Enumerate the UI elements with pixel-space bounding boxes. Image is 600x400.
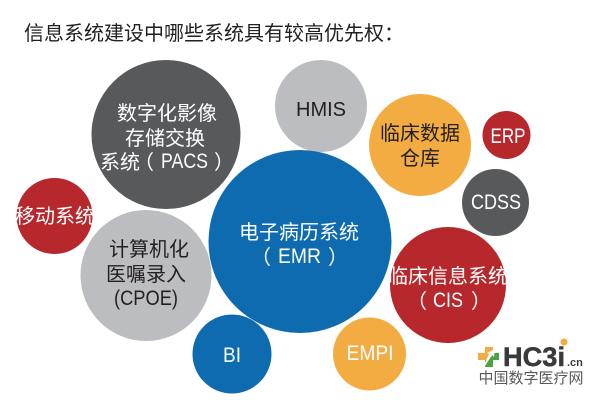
bubble: CIS: ） [471,290,491,313]
bubble: BI: BI [223,344,241,367]
bubble: mobile system [15,178,95,254]
bubble: PACS: 系统 [100,151,140,174]
bubble: CPOE [80,210,212,341]
bubble: clinical data warehouse [369,94,471,196]
bubble: HMIS: HMIS [296,99,346,121]
title: 信息系统建设中哪些系统具有较高优先权： [24,22,404,45]
bubble: CIS: 临床信息系统 [388,265,508,288]
bubble: BI [192,314,272,394]
bubble: EMR: EMR [278,245,321,268]
icon: medical cross [478,347,499,367]
bubble: clinical data warehouse: 临床数据 [380,122,460,145]
bubble: CPOE: (CPOE) [114,287,178,310]
bubble: EMR: 电子病历系统 [239,221,359,244]
logo domain: .cn [567,357,583,369]
bubble: CIS: CIS [433,289,463,312]
logo wordmark: HC3i [503,342,565,372]
bubble: CPOE: 计算机化 [109,238,189,261]
logo tagline: 中国数字医疗网 [478,370,584,387]
bubble: PACS: ） [214,151,234,174]
bubble: PACS [92,60,240,209]
logo: HC3i [478,338,584,387]
bubble: EMR [208,150,392,333]
bubble: CDSS: CDSS [471,191,521,214]
bubble: CDSS [462,169,529,236]
bubble: HMIS [275,60,367,152]
logo dot [560,338,568,346]
bubble: ERP: ERP [490,125,526,148]
bubble: ERP [482,111,530,159]
bubble: PACS: PACS [161,150,208,173]
bubble: EMPI: EMPI [346,342,394,365]
bubble: clinical data warehouse: 仓库 [400,147,440,170]
bubble: PACS: 存储交换 [125,127,205,150]
bubble: CIS: （ [407,290,427,313]
bubble: CIS [388,227,508,343]
bubble: PACS: （ [134,151,154,174]
bubble: EMR: （ [251,246,271,269]
bubble: EMR: ） [328,246,348,269]
bubble: mobile system: 移动系统 [15,205,95,228]
bubble: EMPI [333,318,406,390]
bubble: CPOE: 医嘱录入 [106,264,186,286]
bubble: PACS: 数字化影像 [117,102,217,125]
